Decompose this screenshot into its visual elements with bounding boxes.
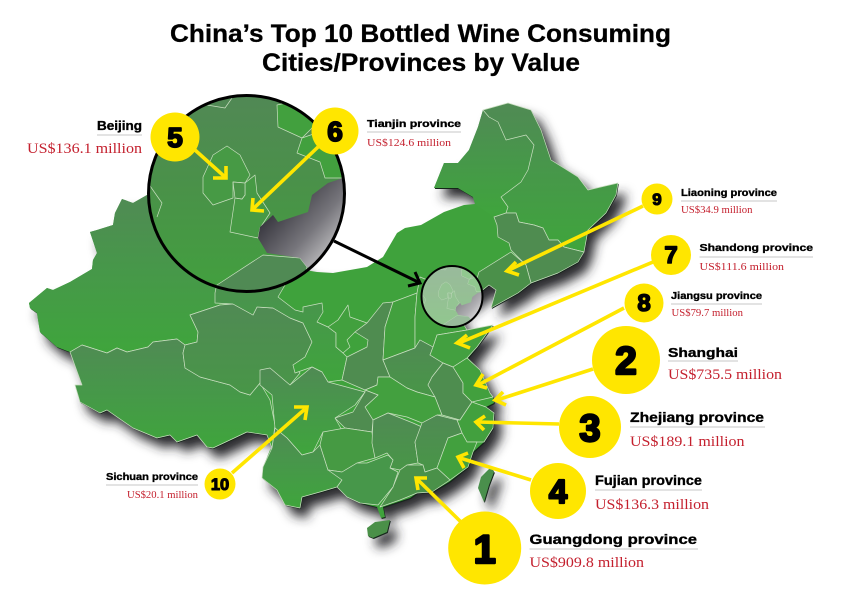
label: Shanghai	[668, 345, 783, 383]
label: Tianjin province: Tianjin province	[367, 119, 462, 130]
region: Gansu	[215, 255, 347, 382]
region: Guangdong	[380, 465, 450, 507]
badge 10	[204, 468, 236, 500]
arrow: 4 Fujian	[458, 453, 531, 480]
badge 9	[642, 184, 672, 214]
arrow: 3 Zhejiang	[476, 416, 559, 430]
label: Beijing: Beijing	[97, 119, 142, 133]
badge 1: 1	[474, 528, 496, 572]
badge 5: 5	[167, 122, 183, 153]
region: Qinghai	[183, 304, 312, 395]
label: Zhejiang province	[630, 410, 765, 450]
badge 9: 9	[652, 190, 662, 209]
badge 10: 10	[211, 476, 229, 494]
label: Jiangsu province: US$79.7 million	[672, 308, 743, 319]
region: Liaoning	[470, 252, 531, 308]
badge 1	[448, 512, 521, 584]
label: Zhejiang province: Zhejiang province	[630, 410, 765, 425]
arrow: 8 Jiangsu	[476, 308, 624, 388]
label: Shandong province	[700, 242, 813, 273]
badge 6: 6	[327, 116, 343, 147]
region: Zhejiang	[457, 402, 494, 442]
badge 8	[624, 284, 664, 322]
islands: Taiwan	[478, 467, 494, 502]
label: Liaoning province: US$34.9 million	[681, 205, 752, 216]
title	[170, 20, 671, 77]
provinces	[29, 103, 618, 508]
label: Sichuan province	[106, 472, 198, 501]
black arrow to inset	[334, 241, 420, 286]
label: Tianjin province	[367, 119, 462, 149]
label: Shanghai: US$735.5 million	[668, 367, 783, 383]
label: Guangdong province	[530, 532, 698, 571]
label: Beijing	[27, 119, 143, 157]
badge 6	[312, 108, 358, 154]
label: Sichuan province: Sichuan province	[106, 472, 198, 483]
region: Guizhou	[320, 428, 375, 472]
label: Fujian province: US$136.3 million	[595, 497, 710, 513]
region: Anhui	[428, 363, 472, 420]
label: Zhejiang province: US$189.1 million	[630, 434, 745, 450]
map base land	[29, 103, 618, 518]
region: Sichuan	[260, 367, 365, 455]
region: Hunan	[372, 413, 422, 470]
region: Shaanxi	[342, 302, 393, 390]
region: Heilongjiang	[483, 103, 618, 252]
region: northern Inner Mongolia	[434, 110, 534, 217]
badge 3	[559, 396, 621, 458]
badge 7	[651, 235, 691, 275]
region: Shanxi	[383, 293, 417, 360]
label: Tianjin province: US$124.6 million	[367, 137, 452, 149]
region: Ningxia	[328, 305, 367, 353]
label: Fujian province	[595, 473, 710, 513]
label: Guangdong province: Guangdong province	[530, 532, 698, 547]
region: Fujian	[437, 433, 477, 480]
region: Chongqing	[335, 390, 378, 432]
region: Jilin	[494, 213, 584, 283]
badge 7: 7	[664, 242, 678, 269]
arrow: 5 Beijing	[195, 150, 226, 178]
region: Hubei	[365, 377, 442, 423]
badge 2: 2	[615, 340, 637, 383]
badge 2	[592, 326, 660, 394]
arrow: 10 Sichuan	[232, 407, 307, 473]
region: Shandong	[430, 325, 493, 367]
badge 4	[530, 463, 586, 519]
region: Jiangsu	[453, 358, 493, 402]
badge 5	[150, 112, 200, 162]
label: Jiangsu province	[671, 291, 762, 319]
region: Hebei	[415, 277, 467, 348]
map dark coast edge	[30, 104, 619, 539]
magnified inset circle	[148, 95, 350, 300]
region: Jiangxi	[415, 415, 462, 472]
arrow: 9 Liaoning	[507, 206, 643, 275]
region: Yunnan	[262, 428, 343, 508]
label: Shandong province: US$111.6 million	[700, 261, 785, 273]
small locator circle	[421, 266, 484, 330]
arrow: 6 Tianjin	[252, 147, 318, 211]
region: Henan	[383, 340, 443, 397]
badge 4: 4	[549, 473, 568, 510]
map drop shadow	[37, 113, 626, 548]
arrow: 7 Shandong	[457, 262, 653, 348]
label: Liaoning province: Liaoning province	[681, 188, 777, 199]
region: Guangxi	[328, 455, 398, 505]
label: Shandong province: Shandong province	[700, 242, 813, 254]
arrow: 2 Shanghai	[495, 369, 593, 405]
label: Guangdong province: US$909.8 million	[530, 555, 645, 571]
label: Shanghai: Shanghai	[668, 345, 738, 360]
title: China’s Top 10 Bottled Wine Consuming	[170, 20, 671, 48]
region: Tibet	[70, 339, 275, 448]
label: Jiangsu province: Jiangsu province	[671, 291, 762, 302]
islands: Hainan	[367, 520, 390, 538]
label: Sichuan province: US$20.1 million	[127, 490, 198, 501]
map of China	[29, 103, 626, 548]
label: Fujian province: Fujian province	[595, 473, 703, 488]
badge 3: 3	[579, 408, 601, 450]
title: Cities/Provinces by Value	[262, 49, 580, 77]
badge 8: 8	[637, 290, 651, 317]
label: Beijing: US$136.1 million	[27, 141, 143, 157]
region: Xinjiang	[29, 195, 220, 353]
arrow: 1 Guangdong	[416, 478, 461, 522]
label: Liaoning province	[681, 188, 777, 216]
